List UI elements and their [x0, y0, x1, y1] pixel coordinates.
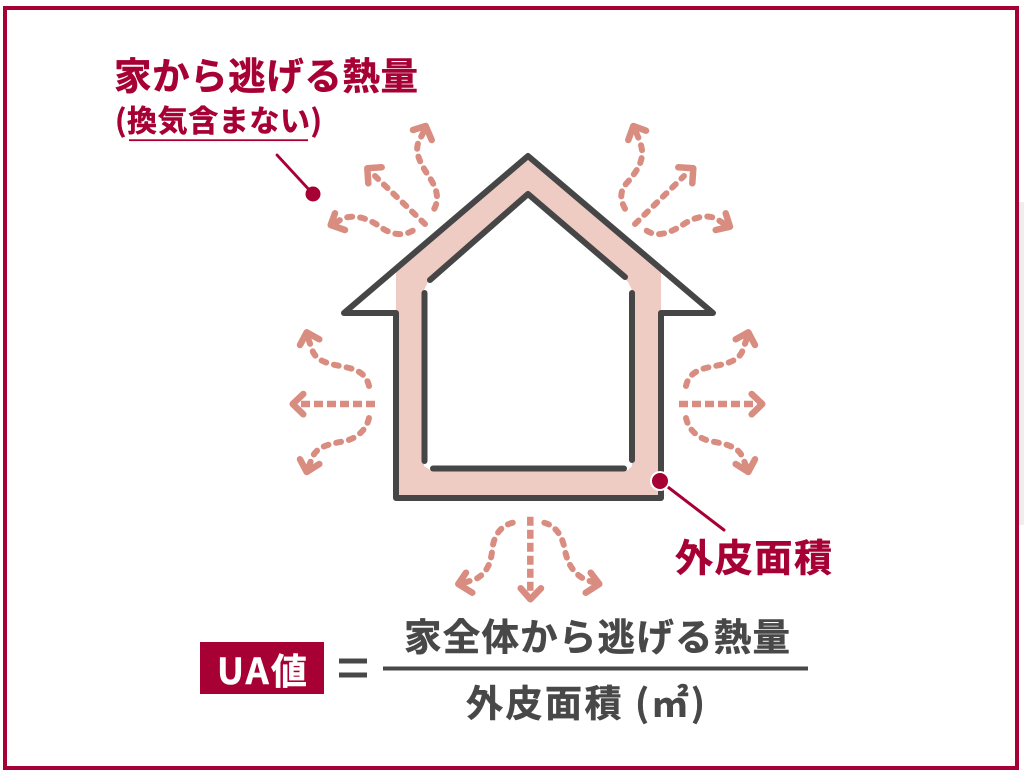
equals sign	[339, 658, 367, 678]
formula	[200, 606, 808, 728]
wall insulation band	[396, 153, 661, 498]
arrows: heat escaping downward	[458, 517, 599, 599]
arrows: heat escaping right	[679, 332, 762, 472]
house inner left wall	[422, 293, 428, 461]
house inner floor line	[433, 466, 624, 472]
house diagram	[344, 153, 713, 498]
house outer outline	[344, 156, 713, 498]
leader dot and line for outer skin area	[650, 471, 724, 530]
arrows: heat escaping upper left	[331, 126, 437, 234]
leader line and dot for heat label	[277, 155, 320, 202]
heading: heat escaping from the house	[114, 46, 418, 141]
label: outer skin area: 外皮面積	[675, 528, 832, 582]
arrows: heat escaping left	[293, 332, 375, 472]
fraction denominator: 外皮面積 (㎡)	[466, 674, 705, 728]
house inner roof line	[430, 194, 625, 280]
fraction numerator: 家全体から逃げる熱量	[404, 606, 790, 662]
fraction bar	[383, 666, 808, 670]
heading text: 家から逃げる熱量	[114, 46, 418, 100]
UA value badge: UA値	[217, 643, 307, 695]
house inner right wall	[629, 293, 635, 460]
sub-heading text: (換気含まない)	[115, 96, 322, 140]
arrows: heat escaping upper right	[621, 126, 730, 234]
sub-heading underline	[129, 139, 308, 141]
